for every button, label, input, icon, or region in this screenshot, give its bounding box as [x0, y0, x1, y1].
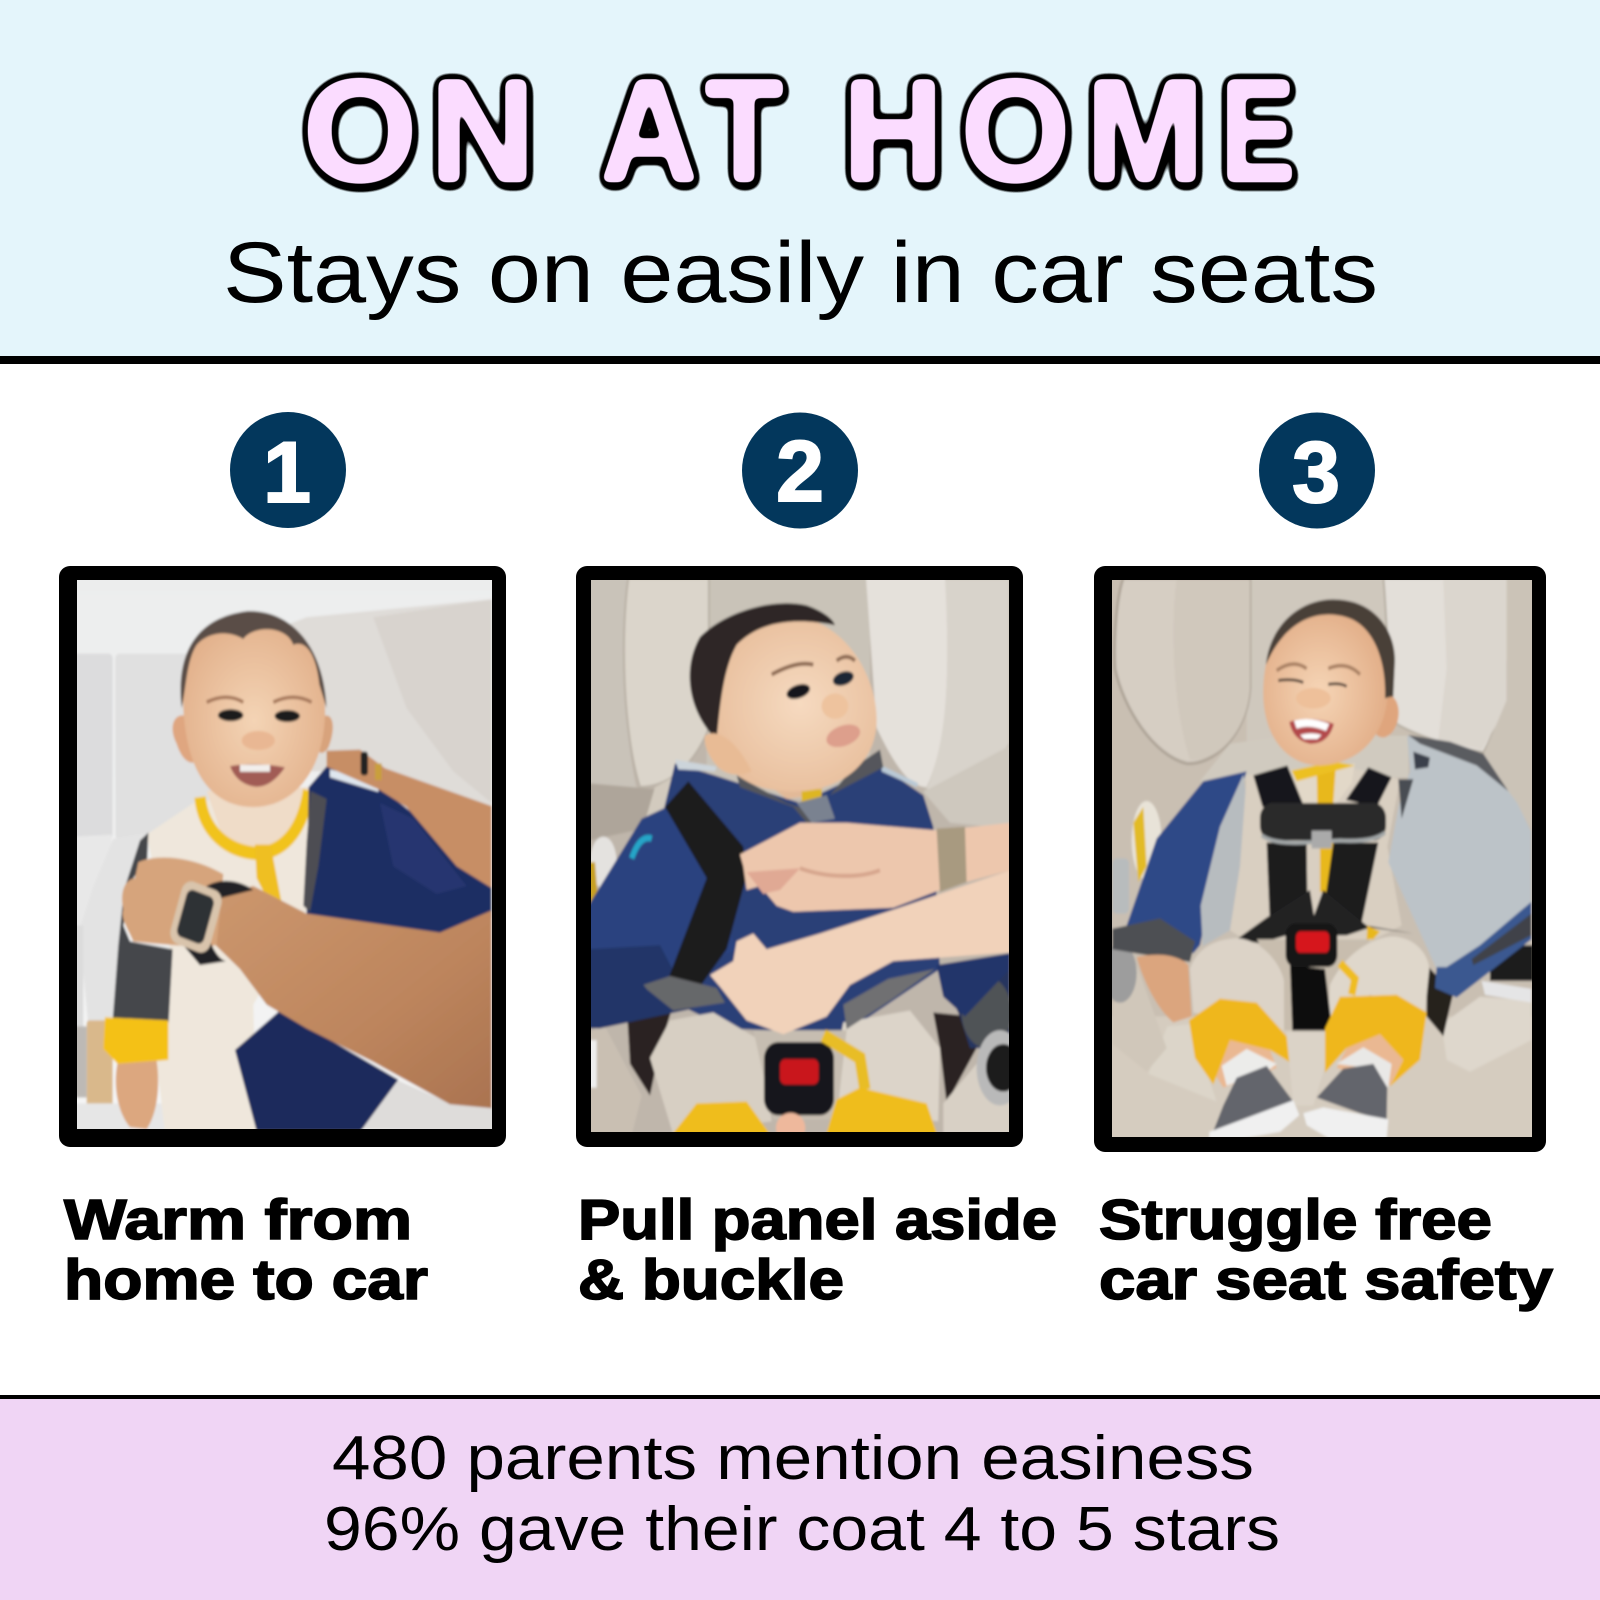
- caption 2: [578, 1188, 1057, 1312]
- legs: [1257, 939, 1370, 1030]
- footer statistics text: 96% gave their coat 4 to 5 stars: [324, 1495, 1280, 1564]
- step number 3: [1259, 412, 1375, 528]
- panel: header background: [0, 0, 1600, 357]
- cuffs: [1189, 999, 1289, 1084]
- hand: [1137, 955, 1192, 1022]
- caption 1: home to car: [64, 1248, 428, 1312]
- liner: [1388, 736, 1532, 968]
- step number 2: [742, 412, 858, 528]
- shoes: [1213, 1066, 1293, 1131]
- body: [147, 795, 317, 1131]
- jacket: [650, 763, 940, 1034]
- straps: [1253, 765, 1303, 807]
- cups: [1112, 946, 1138, 1004]
- sleeve: [1127, 771, 1247, 953]
- title: N: [430, 49, 535, 212]
- legs: [650, 1013, 772, 1135]
- panel: footer background: [0, 1396, 1600, 1600]
- caption 3: Struggle free: [1099, 1188, 1492, 1252]
- chest buckle: [764, 1042, 834, 1115]
- caption 1: [64, 1188, 428, 1312]
- title: O: [303, 49, 417, 212]
- sofa: [73, 654, 113, 839]
- cuffs: [672, 1101, 771, 1135]
- hands: [740, 823, 1010, 912]
- sticker: [590, 837, 617, 888]
- caption 3: car seat safety: [1099, 1248, 1553, 1312]
- step number 3: 3: [1292, 425, 1340, 521]
- hand: [122, 857, 223, 946]
- buckle: [1290, 965, 1332, 1031]
- title: H: [843, 49, 943, 212]
- footer divider line: [0, 1395, 1600, 1399]
- left seat side: [591, 1028, 640, 1132]
- strap: [665, 781, 746, 987]
- title: A: [600, 49, 698, 212]
- caption 1: Warm from: [64, 1188, 412, 1252]
- caption 3: [1099, 1188, 1553, 1312]
- big arm: [212, 886, 492, 1108]
- ankles: [1213, 1038, 1277, 1088]
- caption 2: & buckle: [578, 1248, 844, 1312]
- head: [1376, 695, 1400, 738]
- title: M: [1086, 49, 1204, 212]
- footer statistics text: 480 parents mention easiness: [332, 1424, 1254, 1493]
- buckle tongues: [643, 976, 725, 1011]
- title: O: [961, 49, 1070, 212]
- seat bottom: [1108, 1016, 1535, 1143]
- step number 1: 1: [263, 425, 311, 521]
- right arm: [327, 750, 492, 888]
- footer statistics text: [324, 1424, 1280, 1564]
- photo frame 1: baby on sofa with coat: [59, 566, 506, 1147]
- title: T: [705, 49, 783, 212]
- head: [173, 715, 197, 763]
- subtitle: Stays on easily in car seats: [223, 225, 1378, 321]
- caption 2: Pull panel aside: [578, 1188, 1057, 1252]
- photo frame 3: laughing baby buckled in: [1094, 566, 1546, 1152]
- watch: [183, 881, 253, 965]
- photo frame 2: buckling the harness in a car seat: [576, 566, 1023, 1147]
- header divider line: [0, 356, 1600, 364]
- title: E: [1221, 49, 1295, 212]
- coat: [307, 759, 492, 935]
- lower dark: [627, 1005, 673, 1096]
- sticker: [1132, 801, 1162, 880]
- socks: [1222, 1049, 1277, 1086]
- collar: [200, 790, 309, 854]
- body: [1230, 769, 1402, 945]
- step number 2: 2: [776, 424, 824, 520]
- head: [706, 616, 877, 791]
- step number 1: [230, 412, 346, 528]
